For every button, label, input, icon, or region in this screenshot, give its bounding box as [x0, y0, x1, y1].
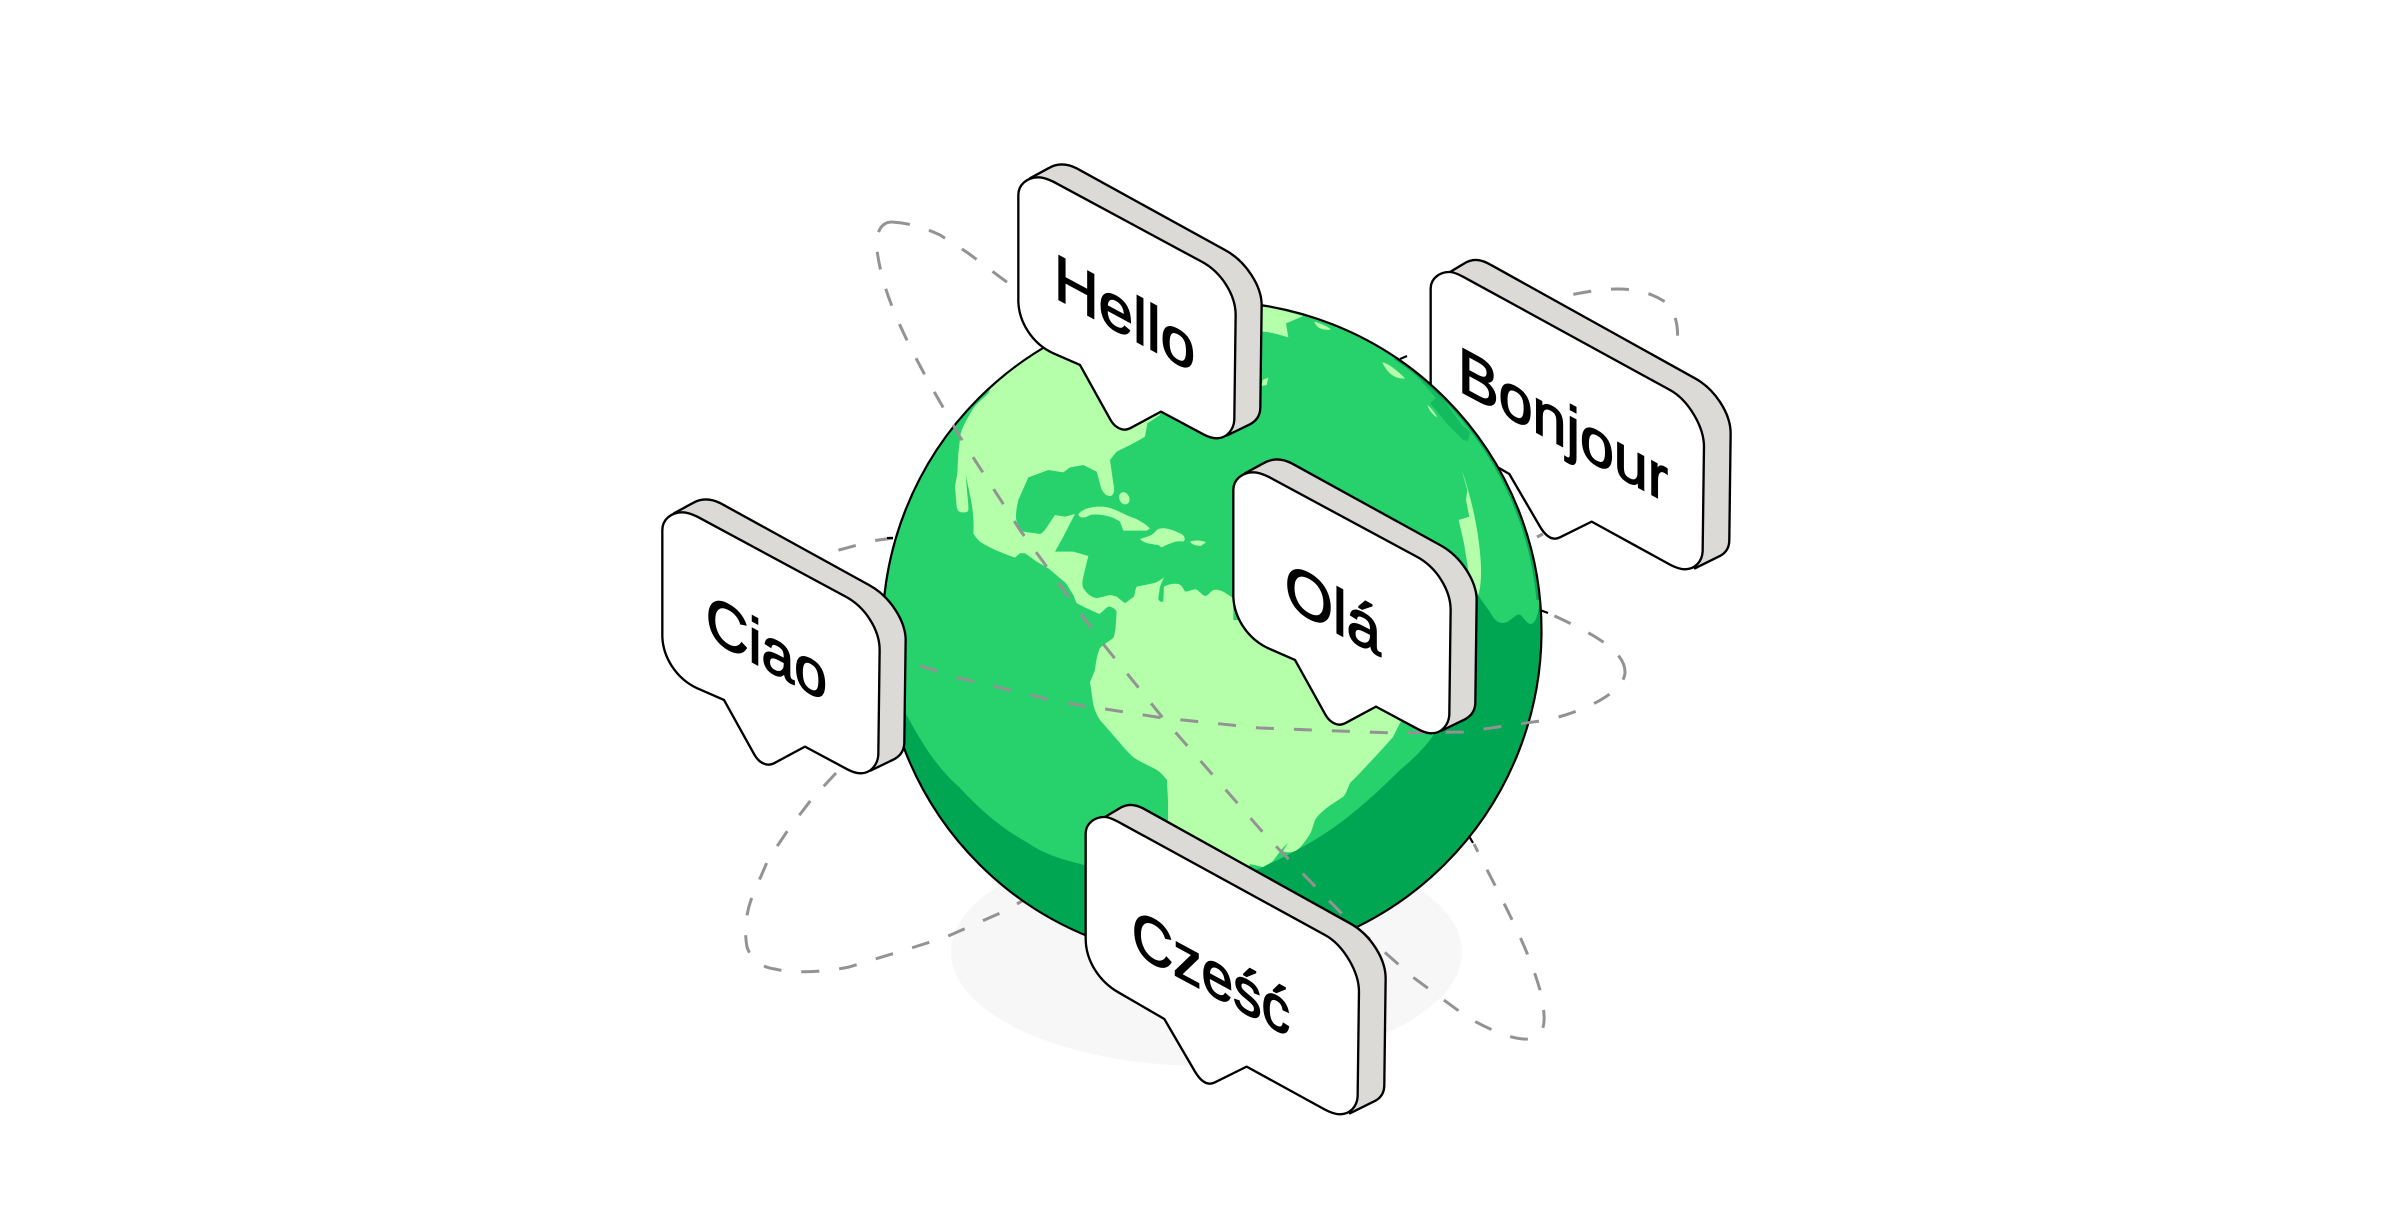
land: far side of the globe	[1262, 305, 1481, 595]
speech bubble: Cześć	[1086, 805, 1386, 1114]
speech bubble: Hello: Hello	[1054, 239, 1195, 387]
speech bubble: Bonjour	[1431, 260, 1731, 569]
lit ocean	[886, 310, 1540, 870]
ocean dark shade	[882, 302, 1542, 960]
speech bubble: Hello	[1018, 165, 1262, 438]
land: south america	[1090, 620, 1402, 867]
speech bubble: Cześć: Cześć	[1132, 894, 1290, 1051]
speech bubble: Ciao: Ciao	[706, 579, 827, 716]
land: caribbean islands	[1078, 490, 1206, 547]
speech bubble: Olá	[1233, 460, 1477, 733]
illustration: globe with greeting speech bubbles	[661, 163, 1732, 1116]
globe	[884, 304, 1543, 936]
globe continents and lit ocean	[886, 306, 1540, 870]
orbit dashes in front of the globe	[877, 222, 1625, 1039]
speech bubble: Olá: Olá	[1285, 547, 1382, 671]
edge shade	[1415, 374, 1470, 441]
orbit entry ticks	[887, 356, 1548, 843]
ground shadow	[951, 838, 1462, 1066]
land: north and central america	[955, 345, 1233, 637]
orbit dashes behind the globe	[746, 222, 1678, 972]
globe outline	[882, 302, 1542, 960]
speech bubble: Bonjour: Bonjour	[1458, 332, 1668, 517]
speech bubble: Ciao	[662, 500, 906, 773]
